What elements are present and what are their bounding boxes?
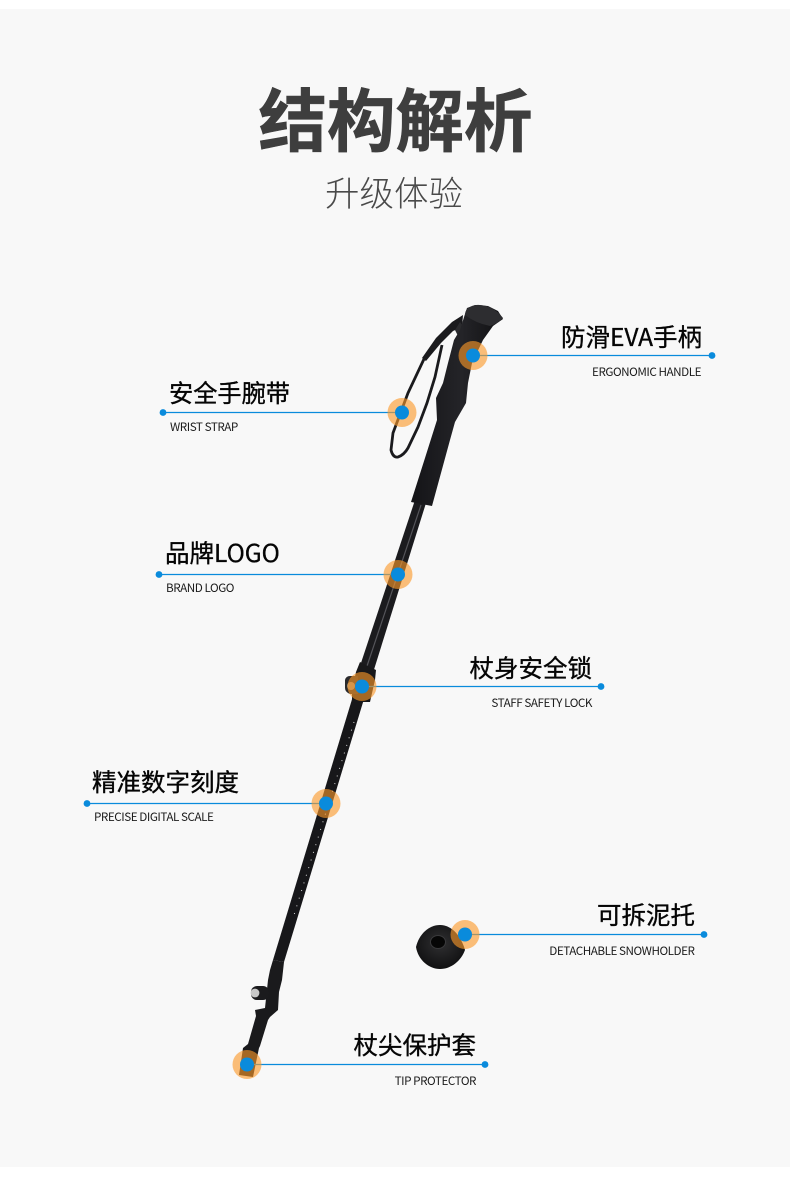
safety lock (345, 662, 376, 702)
callout: ergonomic handle: ERGONOMIC HANDLE (592, 363, 702, 380)
callout: tip protector (232, 1027, 488, 1089)
handle cap (465, 305, 503, 326)
callout: detachable snowholder: DETACHABLE SNOWHOLDER (549, 942, 696, 959)
callout: detachable snowholder: 可拆泥托 (597, 897, 695, 932)
title: 结构解析 (258, 67, 533, 166)
callout: precise digital scale: PRECISE DIGITAL SCALE (94, 808, 214, 825)
callout: brand logo (156, 535, 412, 596)
callout: ergonomic handle: 防滑EVA手柄 (561, 319, 702, 354)
callout: detachable snowholder (450, 897, 707, 959)
callout: staff safety lock: 杖身安全锁 (470, 650, 592, 685)
trekking pole (239, 305, 503, 1077)
wrist strap (391, 315, 463, 457)
callout: tip protector: 杖尖保护套 (354, 1027, 476, 1062)
callout: staff safety lock (348, 650, 604, 711)
callout: staff safety lock: STAFF SAFETY LOCK (491, 694, 593, 711)
upper shaft (358, 500, 426, 676)
callout: ergonomic handle (458, 319, 715, 380)
lower shaft (273, 696, 364, 962)
callout: wrist strap: 安全手腕带 (169, 374, 290, 409)
callout: brand logo: 品牌LOGO (165, 535, 280, 570)
callout: tip protector: TIP PROTECTOR (395, 1072, 477, 1089)
handle grip (411, 305, 503, 506)
lower collar and clamp (239, 960, 284, 1077)
callout: precise digital scale: 精准数字刻度 (92, 764, 239, 799)
subtitle: 升级体验 (325, 166, 463, 216)
callout: brand logo: BRAND LOGO (166, 579, 234, 596)
callout: wrist strap: WRIST STRAP (170, 418, 238, 435)
digital scale marks (294, 722, 354, 915)
snow basket (416, 925, 465, 969)
callout: precise digital scale (84, 764, 340, 825)
callout: wrist strap (160, 374, 416, 435)
